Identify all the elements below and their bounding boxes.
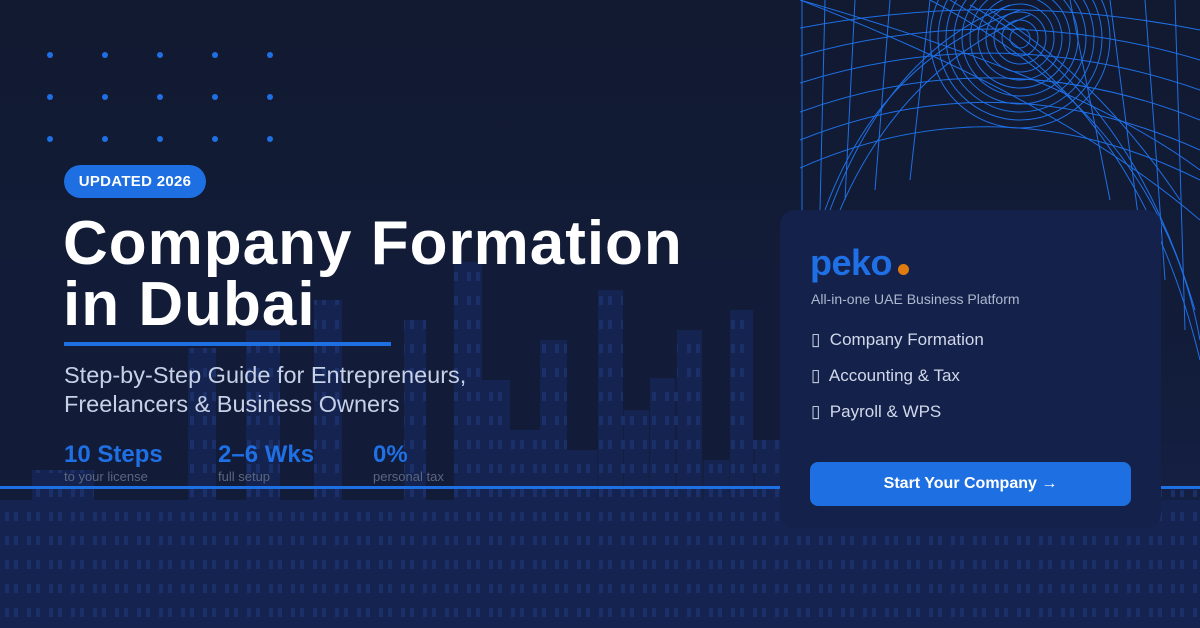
stat: steps: [64, 441, 163, 484]
tagline: All-in-one UAE Business Platform: [811, 291, 1020, 307]
stat: tax: 0%: [373, 441, 408, 468]
title underline: [64, 342, 391, 346]
subtitle: Step-by-Step Guide for Entrepreneurs,: [64, 362, 466, 388]
panel: peko card: [780, 210, 1161, 528]
stat: steps: to your license: [64, 469, 148, 484]
cta button: [810, 462, 1131, 506]
subtitle: Freelancers & Business Owners: [64, 391, 400, 417]
stat: tax: personal tax: [373, 469, 444, 484]
wireframe arch graphic: [800, 0, 1200, 360]
badge: updated 2026: [64, 165, 206, 198]
feature list: ▯ Payroll & WPS: [811, 402, 941, 421]
stat: weeks: [218, 441, 314, 484]
logo: peko: [810, 242, 892, 283]
decorative dot grid: [47, 52, 273, 142]
cta button: Start Your Company →: [884, 475, 1057, 492]
feature list: ▯ Company Formation: [811, 330, 984, 349]
title: Company Formation: [63, 209, 683, 278]
stat: weeks: full setup: [218, 469, 270, 484]
badge: updated 2026: UPDATED 2026: [79, 173, 191, 190]
stat: steps: 10 Steps: [64, 441, 163, 468]
title: in Dubai: [63, 270, 316, 339]
subtitle: [64, 362, 466, 417]
feature list: [811, 330, 984, 421]
horizon line: [0, 486, 1200, 489]
stat: weeks: 2–6 Wks: [218, 441, 314, 468]
feature list: ▯ Accounting & Tax: [811, 366, 960, 385]
title: [63, 209, 683, 339]
stat: tax: [373, 441, 444, 484]
